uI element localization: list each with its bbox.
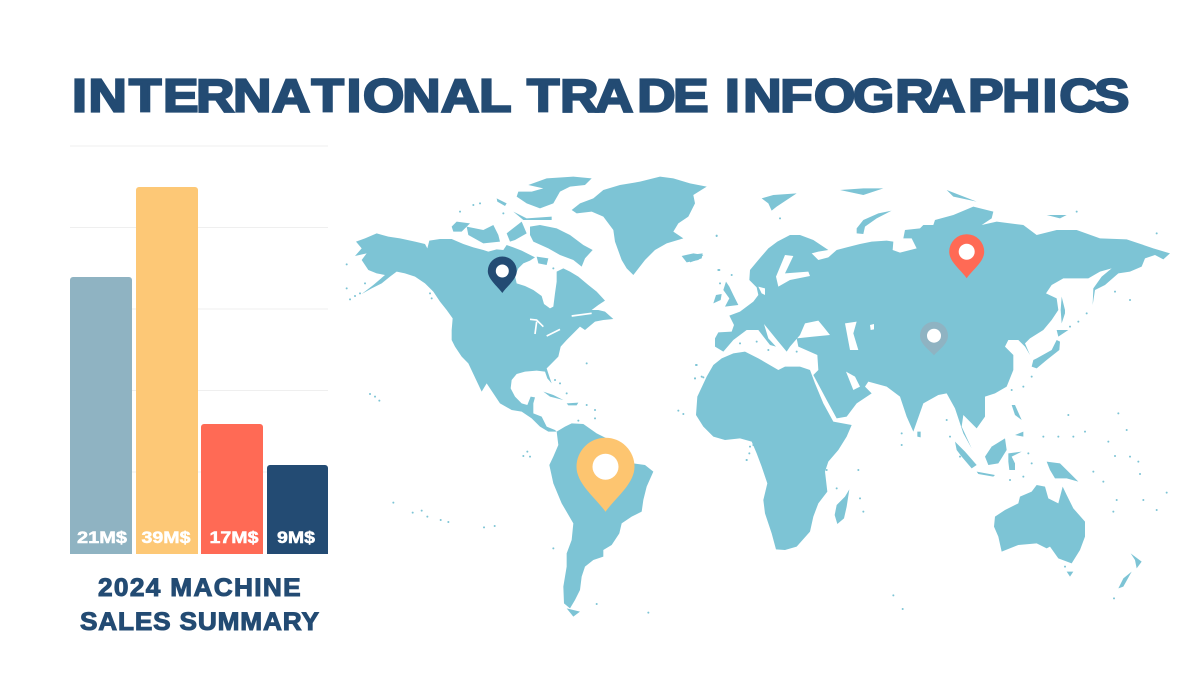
bar: 17M$ bbox=[201, 424, 263, 554]
bar: 17M$: 17M$ bbox=[210, 529, 258, 547]
pin: red, Russia bbox=[949, 234, 984, 278]
bar: 9M$ bbox=[267, 465, 328, 554]
bar: 9M$: 9M$ bbox=[277, 529, 315, 547]
bar: 21M$: 21M$ bbox=[77, 529, 127, 547]
world map bbox=[347, 177, 1170, 617]
eurasia, africa and oceania bbox=[690, 187, 1170, 609]
bar: 39M$ bbox=[136, 187, 198, 554]
bar chart: 2024 machine sales bbox=[70, 146, 328, 554]
pin: yellow, South America bbox=[576, 438, 634, 512]
americas and greenland bbox=[347, 177, 753, 617]
pin: navy, North America bbox=[488, 256, 517, 293]
bar: 39M$: 39M$ bbox=[142, 529, 190, 547]
title: INTERNATIONAL TRADE INFOGRAPHICS bbox=[72, 70, 1129, 122]
chart caption: SALES SUMMARY bbox=[80, 609, 319, 636]
pin: grey, Central Asia bbox=[920, 322, 948, 355]
bar: 21M$ bbox=[70, 277, 132, 554]
chart caption bbox=[80, 575, 319, 636]
chart caption: 2024 MACHINE bbox=[98, 575, 301, 602]
